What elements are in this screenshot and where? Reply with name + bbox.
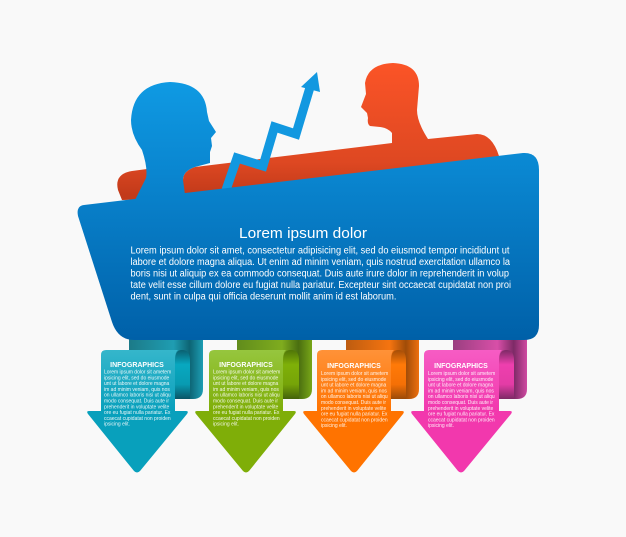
body text: ccaecat cupidatat non proiden xyxy=(428,417,495,423)
body text: prehenderit in voluptate velite xyxy=(104,404,170,410)
body text: modo consequat. Duis aute ir xyxy=(321,400,386,406)
body text: ccaecat cupidatat non proiden xyxy=(104,416,171,422)
body text: ccaecat cupidatat non proiden xyxy=(213,416,280,422)
body text: ipsicing elit. xyxy=(321,423,347,429)
arrow front xyxy=(195,350,296,472)
main blue panel xyxy=(78,153,539,340)
body text: ore eu fugiat nulla pariatur. Ex xyxy=(213,410,280,416)
arrow front xyxy=(303,350,404,472)
body text: prehenderit in voluptate velite xyxy=(213,404,279,410)
arrow front xyxy=(411,350,512,472)
ribbon arrow: teal xyxy=(87,338,203,472)
ribbon arrow: magenta xyxy=(411,338,527,472)
body text: ore eu fugiat nulla pariatur. Ex xyxy=(428,412,495,418)
body text: on ullamco laboris nisi ut aliqu xyxy=(428,394,495,400)
panel body text: dent, sunt in culpa qui officia deserunt mollit anim id est laborum. xyxy=(130,292,396,302)
panel body text: labore et dolore magna aliqua. Ut enim ad minim veniam, quis nostrud exercitation ullamco la xyxy=(130,257,510,268)
body text: Lorem ipsum dolor sit ametem xyxy=(104,370,171,376)
body text: prehenderit in voluptate velite xyxy=(428,406,494,412)
ribbon back xyxy=(129,338,203,399)
body text: ore eu fugiat nulla pariatur. Ex xyxy=(321,412,388,418)
heading: INFOGRAPHICS xyxy=(110,362,164,369)
body text: on ullamco laboris nisi ut aliqu xyxy=(213,393,280,399)
body text: on ullamco laboris nisi ut aliqu xyxy=(104,393,171,399)
body text: modo consequat. Duis aute ir xyxy=(213,398,278,404)
body text: modo consequat. Duis aute ir xyxy=(104,398,169,404)
body text: ipsicing elit. xyxy=(428,423,454,429)
body text xyxy=(213,370,280,428)
body text: Lorem ipsum dolor sit ametem xyxy=(428,371,495,377)
body text: unt ut labore et dolore magna xyxy=(428,383,494,389)
blue person xyxy=(131,82,216,202)
heading: INFOGRAPHICS xyxy=(434,363,488,370)
body text: im ad minim veniam, quis nos xyxy=(104,387,170,393)
body text: ccaecat cupidatat non proiden xyxy=(321,417,388,423)
panel body text xyxy=(130,246,511,302)
body text: ipsicing elit, sed do eiusmode xyxy=(321,377,387,383)
ribbon arrow: green xyxy=(195,338,312,472)
ribbon curl xyxy=(499,350,514,399)
panel heading: Lorem ipsum dolor xyxy=(239,226,367,242)
growth arrow xyxy=(226,72,320,190)
ribbon back xyxy=(346,338,419,399)
body text: im ad minim veniam, quis nos xyxy=(213,387,279,393)
panel body text: Lorem ipsum dolor sit amet, consectetur adipisicing elit, sed do eiusmod tempor incididunt ut xyxy=(130,246,510,256)
arrow front xyxy=(87,350,188,472)
ribbon arrow: orange xyxy=(303,338,419,472)
body text: ipsicing elit. xyxy=(213,422,239,428)
body text: ore eu fugiat nulla pariatur. Ex xyxy=(104,410,171,416)
red person with band xyxy=(117,63,499,200)
body text: on ullamco laboris nisi ut aliqu xyxy=(321,394,388,400)
body text: ipsicing elit, sed do eiusmode xyxy=(428,377,494,383)
panel body text: boris nisi ut aliquip ex ea commodo consequat. Duis aute irure dolor in reprehenderit in volup xyxy=(130,268,509,280)
body text: unt ut labore et dolore magna xyxy=(321,383,387,389)
ribbon curl xyxy=(391,350,406,399)
body text: Lorem ipsum dolor sit ametem xyxy=(321,371,388,377)
body text xyxy=(428,371,495,429)
body text: unt ut labore et dolore magna xyxy=(213,381,279,387)
panel body text: tate velit esse cillum dolore eu fugiat nulla pariatur. Excepteur sint occaecat cupidatat non proi xyxy=(130,280,511,291)
body text: im ad minim veniam, quis nos xyxy=(321,388,387,394)
body text: prehenderit in voluptate velite xyxy=(321,406,387,412)
heading: INFOGRAPHICS xyxy=(327,363,381,370)
body text: unt ut labore et dolore magna xyxy=(104,381,170,387)
ribbon curl xyxy=(175,350,190,399)
ribbon curl xyxy=(283,350,299,399)
body text: ipsicing elit, sed do eiusmode xyxy=(104,375,170,381)
ribbon back xyxy=(453,338,527,399)
body text: ipsicing elit. xyxy=(104,422,130,428)
body text: modo consequat. Duis aute ir xyxy=(428,400,493,406)
ribbon back xyxy=(237,338,312,399)
body text: ipsicing elit, sed do eiusmode xyxy=(213,375,279,381)
body text: im ad minim veniam, quis nos xyxy=(428,388,494,394)
body text: Lorem ipsum dolor sit ametem xyxy=(213,370,280,376)
body text xyxy=(104,370,171,428)
heading: INFOGRAPHICS xyxy=(219,362,273,369)
body text xyxy=(321,371,388,429)
